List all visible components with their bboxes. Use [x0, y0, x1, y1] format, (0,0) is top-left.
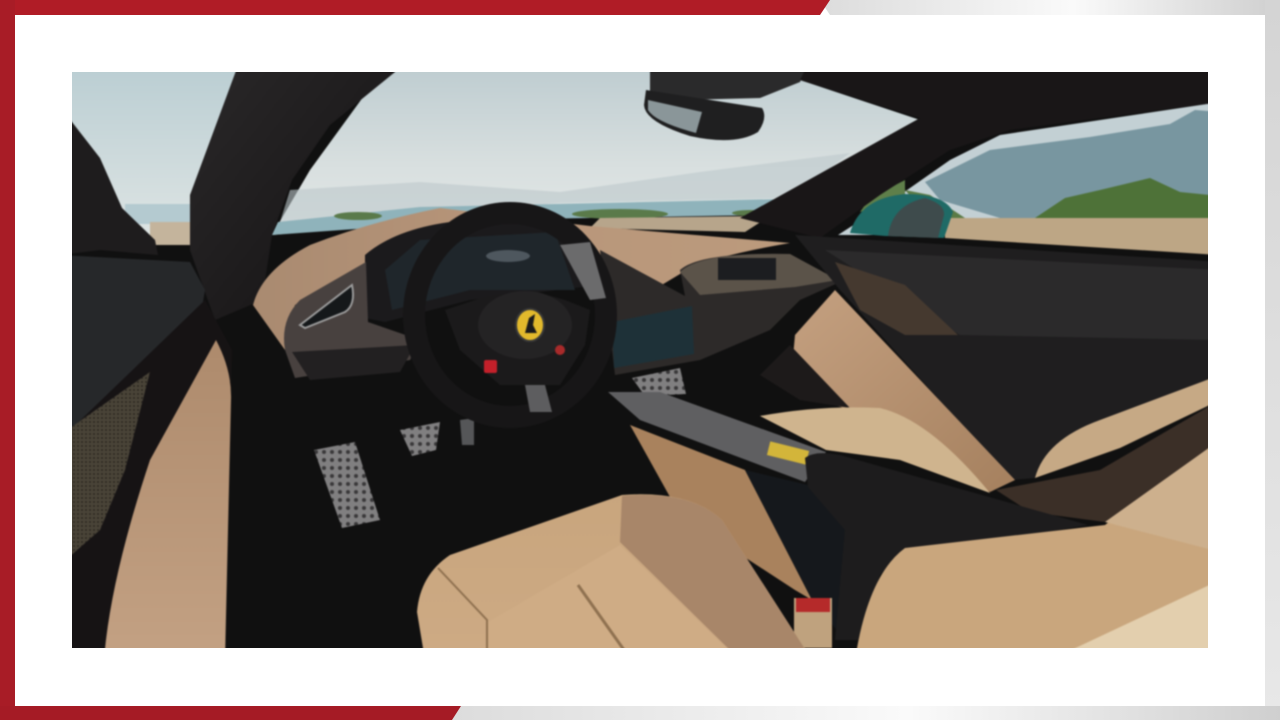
dash left fascia [284, 262, 420, 378]
centre tan pillar [790, 290, 1015, 492]
left door upper [72, 256, 205, 427]
centre console [608, 392, 826, 482]
driver seat [417, 494, 812, 660]
green door mirror [850, 194, 953, 238]
left door tan panel [104, 340, 231, 660]
instrument binnacle [365, 220, 600, 322]
photo: car interior [60, 60, 1220, 660]
right dash and screen [600, 250, 840, 375]
icon: Ferrari badge [516, 309, 544, 341]
steering wheel [414, 213, 606, 417]
seat belt buckle [794, 598, 832, 648]
dash top tan [253, 208, 790, 350]
frame: grey bottom bar [452, 706, 1280, 720]
frame: grey top bar [820, 0, 1280, 15]
tan wall outside [945, 218, 1220, 255]
frame: grey right bar [1265, 0, 1280, 720]
pedals [314, 418, 474, 528]
roof header and rear pillar [740, 72, 1208, 236]
left door speaker mesh [72, 372, 150, 555]
black armrest [805, 453, 1088, 640]
passenger seat back [996, 375, 1220, 522]
passenger seat cushion [760, 407, 990, 493]
right side window with mountains [838, 102, 1220, 235]
windscreen [272, 60, 920, 235]
left side window [72, 72, 237, 246]
rear view mirror [643, 72, 804, 142]
frame: red top bar [0, 0, 830, 15]
A pillar [190, 60, 395, 320]
frame: red left bar [0, 0, 15, 720]
frame: red bottom bar [0, 706, 461, 720]
right door panel [795, 235, 1220, 480]
tan tunnel side [630, 425, 812, 600]
right seat [856, 448, 1208, 648]
left door mirror and sail [72, 120, 158, 254]
